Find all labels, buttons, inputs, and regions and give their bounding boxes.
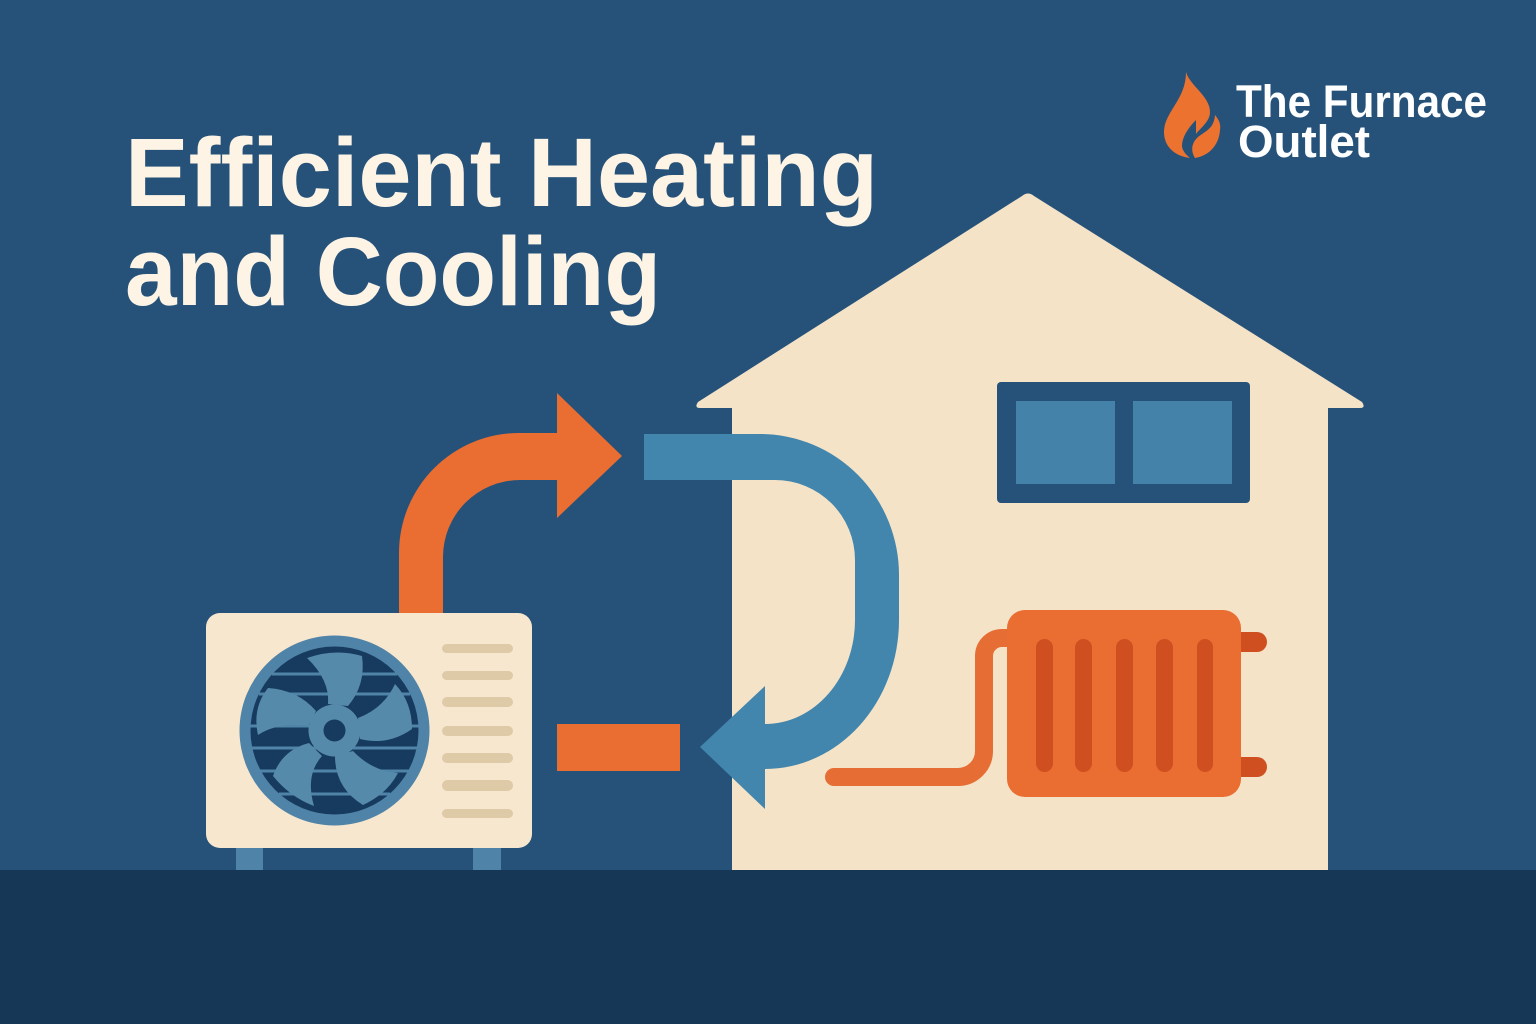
fan blades xyxy=(256,652,412,806)
icon: flame xyxy=(1164,72,1220,158)
logo: The Furnace Outlet xyxy=(1164,72,1487,167)
title: Efficient Heating xyxy=(125,118,878,227)
fan grille bars xyxy=(250,674,419,794)
icon: fan xyxy=(240,636,430,826)
unit feet xyxy=(236,846,501,870)
radiator valves xyxy=(1230,632,1267,777)
brand name: The Furnace xyxy=(1236,76,1487,127)
brand name: Outlet xyxy=(1238,116,1370,167)
arrow: orange flow up to house xyxy=(399,393,622,613)
vent slots xyxy=(442,644,513,818)
title xyxy=(125,118,878,326)
radiator xyxy=(834,610,1267,797)
radiator pipe xyxy=(834,638,1010,777)
radiator fins xyxy=(1036,639,1213,772)
arrow: blue flow through house xyxy=(644,434,899,809)
orange return bar xyxy=(557,724,680,771)
unit casing xyxy=(206,613,532,848)
house body xyxy=(696,194,1364,870)
radiator panel xyxy=(1007,610,1241,797)
fan hub xyxy=(324,720,346,742)
house xyxy=(696,194,1364,870)
window xyxy=(997,382,1250,503)
brand name xyxy=(1236,76,1487,167)
outdoor heat pump unit xyxy=(206,613,532,870)
ground band xyxy=(0,870,1536,1024)
title: and Cooling xyxy=(125,217,661,326)
